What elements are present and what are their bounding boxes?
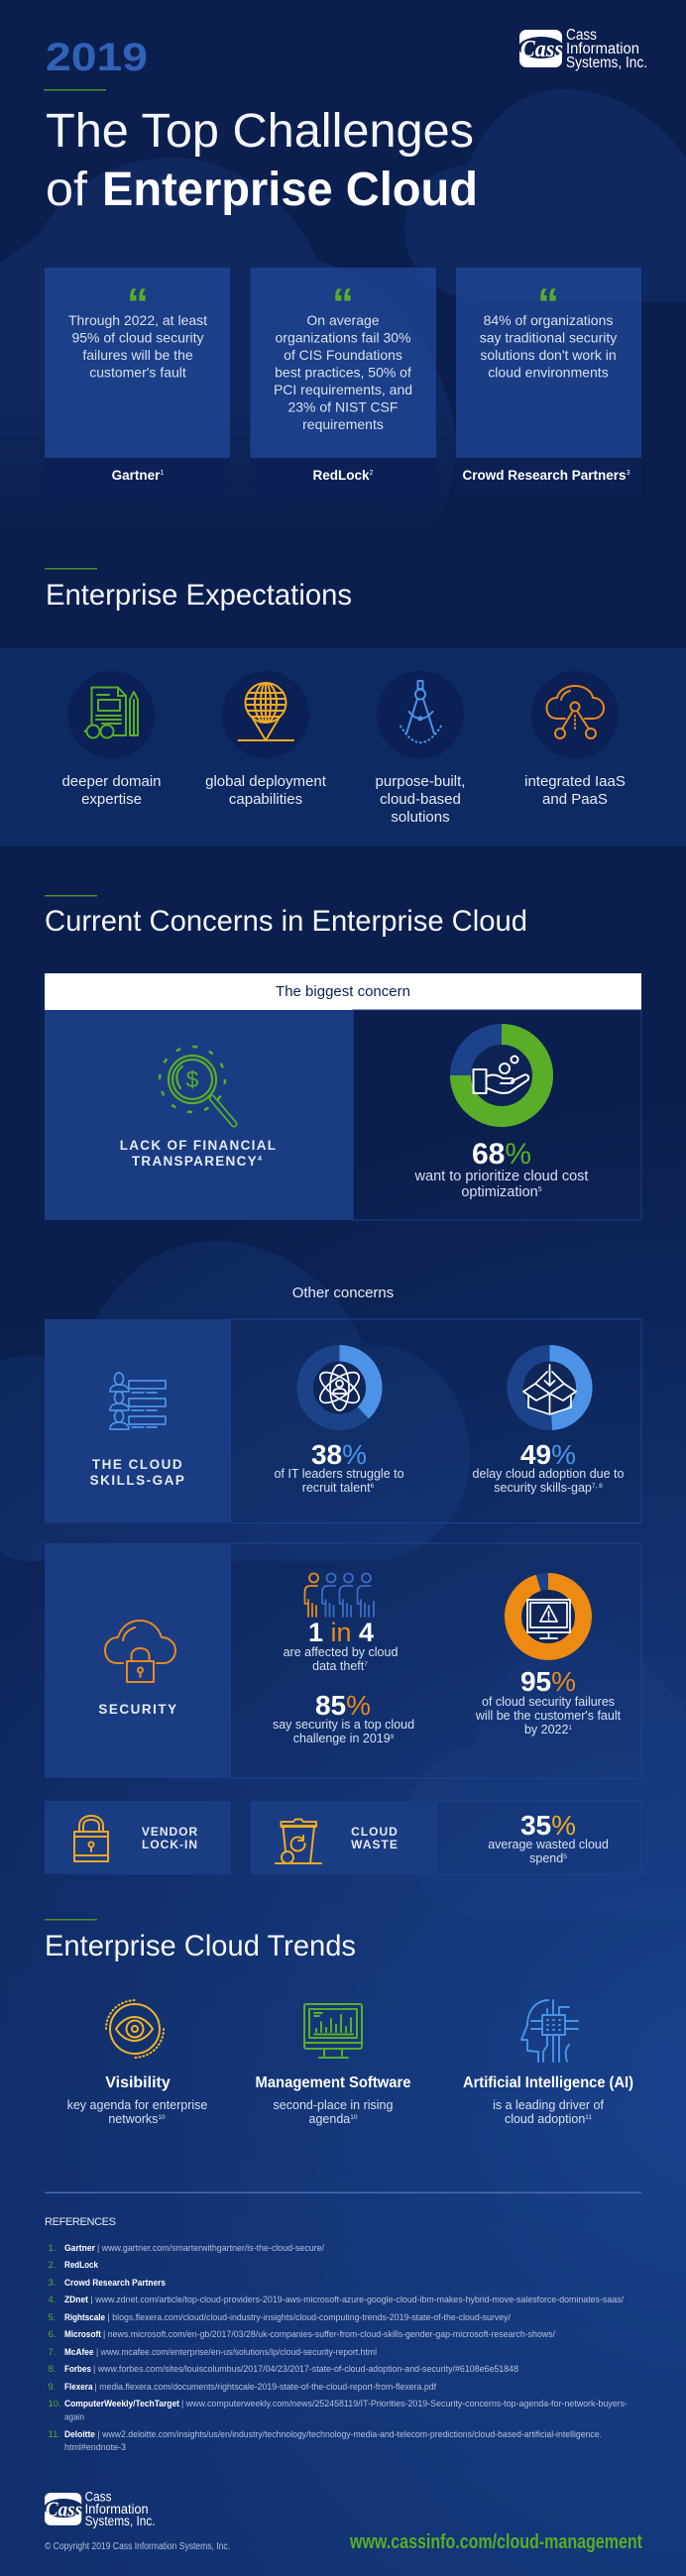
stat: 68%: 68%	[472, 1138, 531, 1171]
panel: quote Crowd Research Partners: say traditional security	[480, 329, 617, 345]
chart: donut 38%	[305, 1353, 374, 1422]
label: cloud waste: WASTE	[351, 1838, 399, 1851]
panel: quote RedLock: best practices, 50% of	[275, 365, 411, 381]
text: affected by data theft: are affected by cloud	[284, 1645, 398, 1659]
panel: quote RedLock: On average	[306, 312, 380, 328]
panel: quote Crowd Research Partners: solutions don't work in	[480, 347, 617, 363]
panel: quote Gartner: “	[127, 280, 149, 328]
panel: quote Gartner: customer's fault	[89, 365, 186, 381]
stat: 1 in 4: 1 in 4	[308, 1618, 374, 1647]
reference list: again	[64, 2412, 84, 2422]
panel: quote RedLock	[250, 268, 436, 496]
text: top cloud challenge: challenge in 2019	[293, 1732, 395, 1745]
title: artificial intelligence: Artificial Intelligence (AI)	[463, 2074, 633, 2091]
reference list: | www.computerweekly.com/news/252458119/IT-Priorities-2019-Security-concerns-top-agenda-for-network-buyers-	[181, 2399, 628, 2409]
logo: Cass Information Systems top: Cass	[566, 27, 597, 44]
icon: AI head with chip	[521, 2000, 578, 2062]
label: integrated IaaS and PaaS: integrated IaaS	[524, 773, 626, 790]
panel: quote Gartner: failures will be the	[82, 347, 193, 363]
label: purpose-built solutions: cloud-based	[380, 791, 461, 808]
icon: four people	[305, 1574, 374, 1617]
label: lack of financial transparency: 4	[258, 1156, 263, 1163]
text: customer's fault: will be the customer's fault	[475, 1709, 622, 1723]
icon: documents and glasses	[67, 671, 155, 758]
label: cloud waste: CLOUD	[351, 1825, 399, 1839]
panel: quote Crowd Research Partners: Crowd Research Partners	[463, 468, 627, 483]
text: affected by data theft: 7	[364, 1661, 368, 1668]
panel: quote Crowd Research Partners: 84% of organizations	[484, 312, 613, 328]
text: second-place: 10	[350, 2114, 358, 2121]
text: average wasted spend: 5	[563, 1853, 567, 1860]
text: top cloud challenge: 9	[391, 1734, 395, 1740]
text: want to prioritize: 5	[538, 1186, 542, 1193]
panel: expectations band	[0, 648, 686, 846]
panel: the biggest concern	[45, 973, 641, 1220]
icon: magnifier with dollar	[160, 1047, 234, 1124]
chart: donut 68%	[460, 1035, 543, 1116]
subheading: other concerns: Other concerns	[292, 1285, 394, 1301]
reference list: | www.gartner.com/smarterwithgartner/is-the-cloud-secure/	[97, 2243, 324, 2254]
reference list: | www.mcafee.com/enterprise/en-us/solutions/lp/cloud-security-report.html	[96, 2347, 377, 2358]
text: key agenda: key agenda for enterprise	[67, 2098, 207, 2112]
reference list: | www.zdnet.com/article/top-cloud-providers-2019-aws-microsoft-azure-google-cloud-ibm-makes-hybrid-move-salesforce-dominates-saas/	[91, 2295, 624, 2305]
icon: monitor chart	[304, 2004, 362, 2058]
reference list: | www2.deloitte.com/insights/us/en/industry/technology/technology-media-and-telecom-predictions/cloud-based-artificial-intelligence.	[97, 2429, 602, 2440]
panel: security	[45, 1543, 641, 1778]
reference list: ComputerWeekly/TechTarget	[64, 2399, 180, 2409]
logo: Cass Information Systems top: Systems, Inc.	[566, 55, 647, 71]
icon: people list	[110, 1373, 166, 1429]
icon: hand with coins	[474, 1057, 528, 1093]
panel: quote Gartner: 1	[160, 470, 164, 477]
reference list: Microsoft	[64, 2329, 102, 2340]
text: top cloud challenge: say security is a top cloud	[273, 1718, 414, 1732]
reference list: Flexera	[64, 2382, 93, 2393]
text: key agenda: networks	[108, 2112, 166, 2126]
reference list: RedLock	[64, 2260, 99, 2271]
reference list: McAfee	[64, 2347, 93, 2358]
icon: padlock	[74, 1816, 108, 1861]
reference list: 2.	[48, 2260, 56, 2271]
logo: Cass Information Systems footer: Cass	[46, 2499, 82, 2520]
reference list: | media.flexera.com/documents/rightscale-2019-state-of-the-cloud-report-from-flexera.pdf	[95, 2382, 436, 2393]
stat: 49%: 49%	[520, 1439, 576, 1470]
reference list: html#endnote-3	[64, 2442, 126, 2453]
logo: Cass Information Systems top: Cass	[520, 37, 563, 62]
title: of	[46, 164, 88, 216]
references	[45, 2216, 628, 2453]
text: delay cloud adoption: security skills-gap	[494, 1481, 603, 1495]
panel: quote Crowd Research Partners: “	[537, 280, 559, 328]
reference list	[48, 2243, 628, 2453]
label: global deployment capabilities: capabilities	[229, 791, 302, 808]
reference list: 1.	[48, 2243, 56, 2254]
icon: open box	[523, 1365, 576, 1414]
text: delay cloud adoption: delay cloud adoption due to	[473, 1467, 624, 1481]
text: want to prioritize: want to prioritize cloud cost	[414, 1169, 588, 1184]
icon: cloud lock	[105, 1621, 175, 1682]
icon: cloud with nodes	[531, 671, 619, 758]
panel: quote Gartner: Through 2022, at least	[68, 312, 207, 328]
panel: quote Gartner: Gartner	[112, 468, 160, 483]
text: leading driver: is a leading driver of	[493, 2098, 604, 2112]
reference list: ZDnet	[64, 2295, 89, 2305]
title: The Top Challenges	[46, 105, 474, 158]
stat: 38%: 38%	[311, 1439, 367, 1470]
reference list: Crowd Research Partners	[64, 2278, 166, 2289]
icon: atom	[315, 1365, 364, 1410]
icon: globe pin	[222, 671, 309, 758]
label: the cloud skills-gap: SKILLS-GAP	[90, 1473, 185, 1488]
reference list: | news.microsoft.com/en-gb/2017/03/28/uk-companies-suffer-from-cloud-skills-gender-gap-microsoft-research-shows/	[103, 2329, 555, 2340]
reference list: Forbes	[64, 2364, 91, 2375]
title: management software: Management Software	[256, 2074, 411, 2091]
trend: artificial intelligence	[463, 2000, 633, 2126]
panel: quote Gartner	[45, 268, 230, 496]
label: deeper domain expertise: deeper domain	[61, 773, 162, 790]
stat: 85%: 85%	[315, 1690, 371, 1721]
panel: quote RedLock: “	[332, 280, 354, 328]
icon: eye	[106, 2000, 164, 2058]
panel: quote RedLock: of CIS Foundations	[284, 347, 402, 363]
stat: 35%: 35%	[520, 1810, 576, 1841]
icon: compass	[377, 671, 464, 758]
heading: references: REFERENCES	[45, 2216, 116, 2228]
text: leading driver: 11	[585, 2114, 592, 2121]
text: IT leaders: recruit talent	[302, 1481, 375, 1495]
label: security: SECURITY	[98, 1702, 178, 1717]
label: purpose-built solutions: purpose-built,	[376, 773, 465, 790]
text: average wasted spend: average wasted cloud	[488, 1838, 609, 1851]
text: want to prioritize: optimization	[461, 1184, 542, 1200]
label: purpose-built solutions: solutions	[391, 809, 450, 826]
text: IT leaders: 6	[371, 1483, 375, 1490]
panel: quote Crowd Research Partners	[456, 268, 641, 496]
logo: Cass Information Systems footer	[44, 2490, 156, 2528]
trend: management software	[256, 2004, 411, 2126]
label: vendor lock-in: VENDOR	[142, 1825, 198, 1839]
title	[46, 105, 478, 216]
text: leading driver: cloud adoption	[505, 2112, 592, 2126]
label: lack of financial transparency: TRANSPARENCY	[132, 1154, 263, 1169]
label: the cloud skills-gap: THE CLOUD	[92, 1457, 183, 1472]
panel: quote RedLock: organizations fail 30%	[276, 329, 410, 345]
heading: Enterprise Expectations: Enterprise Expectations	[46, 579, 352, 612]
year label: 2019	[46, 36, 148, 79]
reference list: 8.	[48, 2364, 56, 2375]
background clouds	[0, 89, 686, 1918]
panel: vendor lock-in	[45, 1801, 230, 1874]
text: average wasted spend: spend	[529, 1851, 567, 1865]
panel: quote Crowd Research Partners: 3	[627, 470, 630, 477]
reference list: 4.	[48, 2295, 56, 2305]
reference list: | blogs.flexera.com/cloud/cloud-industry-insights/cloud-computing-trends-2019-state-of-the-cloud-survey/	[107, 2312, 511, 2323]
text: second-place: agenda	[309, 2112, 358, 2126]
panel: cloud skills gap	[45, 1319, 641, 1522]
panel: cloud waste	[251, 1801, 641, 1874]
label: integrated IaaS and PaaS: and PaaS	[542, 791, 608, 808]
icon: monitor warning	[527, 1600, 570, 1638]
reference list: 11.	[48, 2429, 60, 2440]
logo: Cass Information Systems footer: Cass	[85, 2490, 112, 2505]
icon: magnifier with dollar: $	[186, 1066, 199, 1092]
text: customer's fault: of cloud security failures	[482, 1695, 615, 1709]
label: vendor lock-in: LOCK-IN	[142, 1838, 198, 1851]
reference list: Gartner	[64, 2243, 95, 2254]
reference list: Rightscale	[64, 2312, 105, 2323]
reference list: 6.	[48, 2329, 56, 2340]
reference list: | www.forbes.com/sites/louiscolumbus/2017/04/23/2017-state-of-cloud-adoption-and-security/#6108e6e51848	[93, 2364, 518, 2375]
chart: donut 95%	[514, 1582, 583, 1651]
panel: quote RedLock: 23% of NIST CSF	[287, 398, 399, 414]
icon: recycle bin	[276, 1820, 321, 1863]
text: affected by data theft: data theft	[312, 1659, 368, 1673]
reference list: 7.	[48, 2347, 56, 2358]
panel: quote Gartner: 95% of cloud security	[71, 329, 204, 345]
heading: Current Concerns: Current Concerns in Enterprise Cloud	[45, 905, 527, 938]
copyright: © Copyright 2019 Cass Information Systems, Inc.	[45, 2541, 230, 2552]
panel: quote Crowd Research Partners: cloud environments	[488, 365, 609, 381]
reference list: 5.	[48, 2312, 56, 2323]
reference list: 3.	[48, 2278, 56, 2289]
label: lack of financial transparency: LACK OF FINANCIAL	[120, 1138, 277, 1153]
logo: Cass Information Systems top	[518, 27, 647, 71]
label: global deployment capabilities: global deployment	[205, 773, 327, 790]
logo: Cass Information Systems top: Information	[566, 41, 639, 57]
label: deeper domain expertise: expertise	[81, 791, 142, 808]
title: Enterprise Cloud	[102, 164, 478, 216]
heading: Enterprise Cloud Trends: Enterprise Cloud Trends	[45, 1930, 356, 1962]
title: visibility: Visibility	[105, 2074, 171, 2091]
panel: quote RedLock: RedLock	[313, 468, 370, 483]
text: second-place: second-place in rising	[274, 2098, 393, 2112]
text: customer's fault: by 2022	[524, 1723, 572, 1736]
text: delay cloud adoption: 7, 8	[592, 1483, 603, 1490]
reference list: Deloitte	[64, 2429, 95, 2440]
trend: visibility	[67, 2000, 207, 2126]
panel: quote RedLock: requirements	[302, 416, 384, 432]
reference list: 10.	[48, 2399, 61, 2409]
logo: Cass Information Systems footer: Information	[85, 2502, 149, 2517]
stat: 95%: 95%	[520, 1666, 576, 1697]
text: customer's fault: 1	[568, 1725, 572, 1732]
text: key agenda: 10	[158, 2114, 166, 2121]
chart: donut 49%	[515, 1353, 584, 1422]
panel: the biggest concern: The biggest concern	[276, 983, 410, 1000]
logo: Cass Information Systems footer: Systems, Inc.	[85, 2514, 156, 2528]
panel: quote RedLock: 2	[370, 470, 374, 477]
reference list: 9.	[48, 2382, 56, 2393]
panel: quote RedLock: PCI requirements, and	[274, 382, 412, 397]
text: IT leaders: of IT leaders struggle to	[274, 1467, 404, 1481]
